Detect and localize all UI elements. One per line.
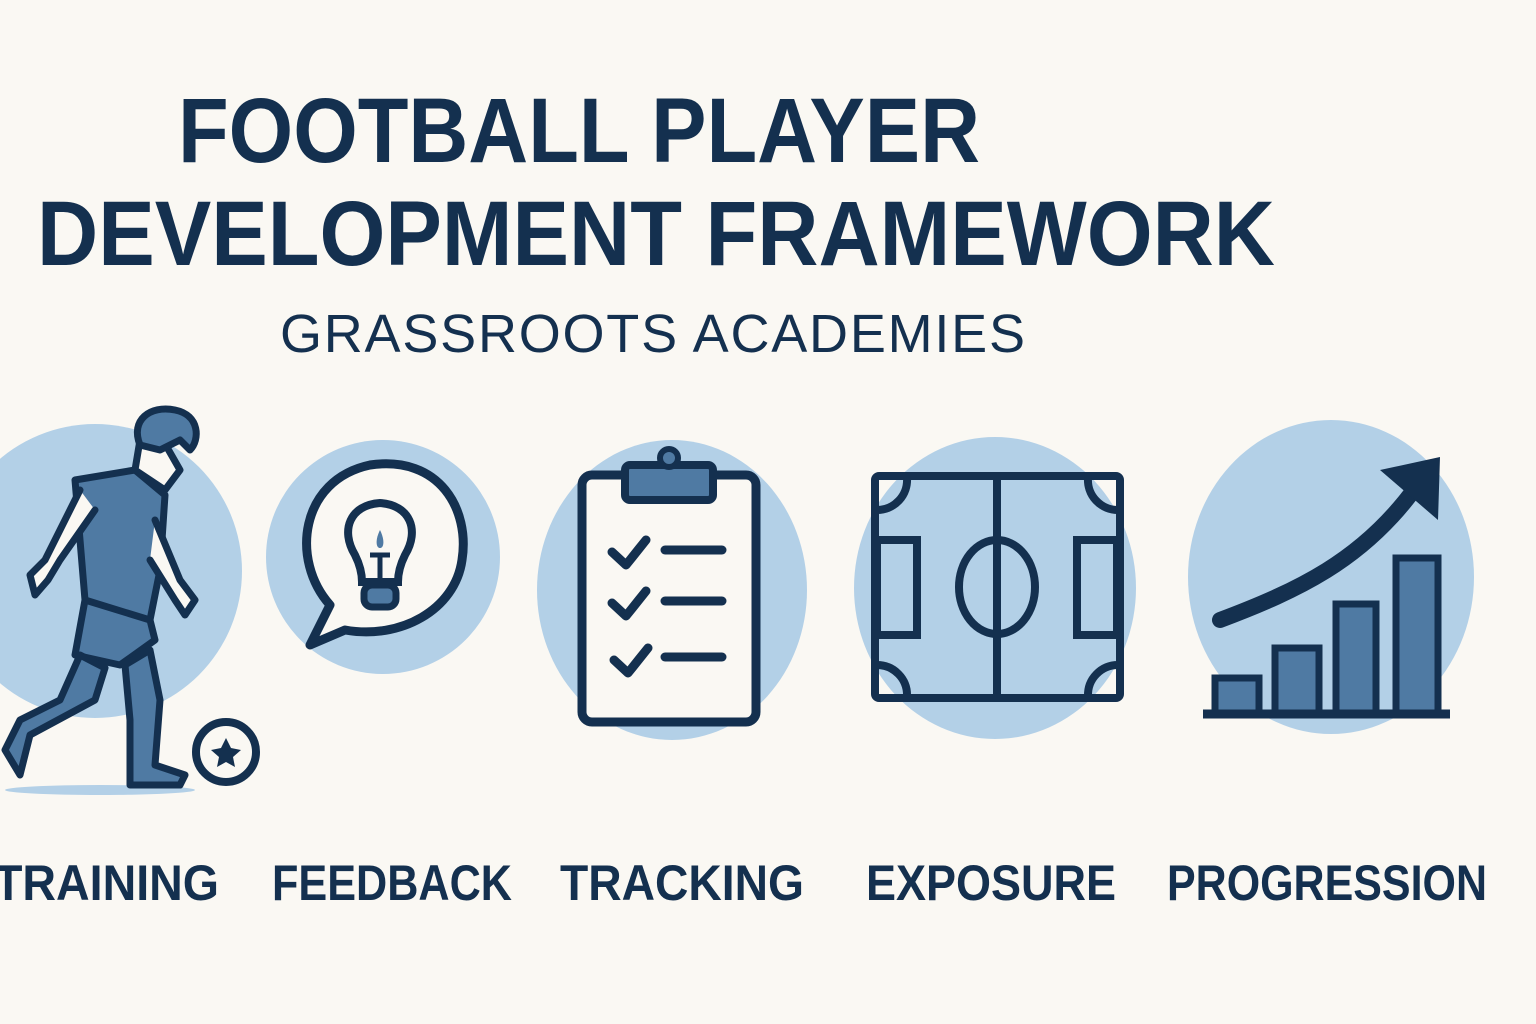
icon: feedback [266,440,500,674]
labels: FEEDBACK [272,855,512,911]
labels: TRAINING [0,855,219,911]
labels: EXPOSURE [866,855,1116,911]
labels: PROGRESSION [1167,855,1487,911]
subtitle: GRASSROOTS ACADEMIES [280,304,1025,364]
icon: training player [0,409,256,795]
title: FOOTBALL PLAYER [178,80,980,182]
title: DEVELOPMENT FRAMEWORK [37,183,1275,285]
title [37,80,1275,285]
labels: TRACKING [560,855,804,911]
icon: tracking clipboard [537,440,807,740]
labels [0,855,1487,911]
icon: exposure pitch [854,437,1136,739]
icon: progression chart [1188,420,1474,734]
